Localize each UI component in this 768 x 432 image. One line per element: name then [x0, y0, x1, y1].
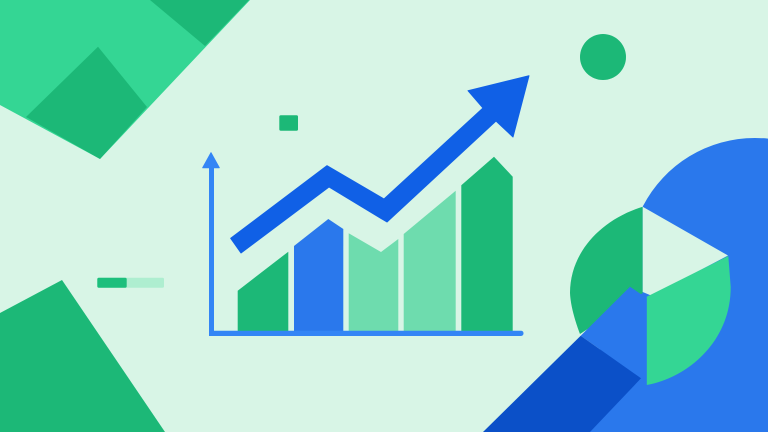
decorative shape: top-left green facets	[0, 0, 250, 159]
bar 2	[294, 219, 343, 331]
bar 5	[461, 157, 513, 331]
decorative shape: large blue circle	[590, 138, 768, 432]
progress pill	[97, 278, 164, 288]
chart axes	[203, 153, 523, 336]
diagonal band	[483, 287, 647, 432]
pie chart	[570, 207, 731, 385]
bar 4	[404, 191, 456, 331]
pie segment: pale	[643, 207, 728, 296]
pie segment: light green	[647, 256, 731, 385]
trend arrow	[231, 76, 529, 253]
pie segment: dark green	[570, 207, 643, 334]
green circle	[580, 34, 626, 80]
bar 1	[238, 252, 288, 331]
band: dark blue	[483, 336, 641, 432]
small green square	[279, 115, 298, 131]
bar chart	[238, 157, 513, 331]
band: mid blue tip	[581, 287, 647, 385]
decorative shape: bottom-left green polygon	[0, 280, 165, 432]
bar 3	[349, 233, 398, 331]
